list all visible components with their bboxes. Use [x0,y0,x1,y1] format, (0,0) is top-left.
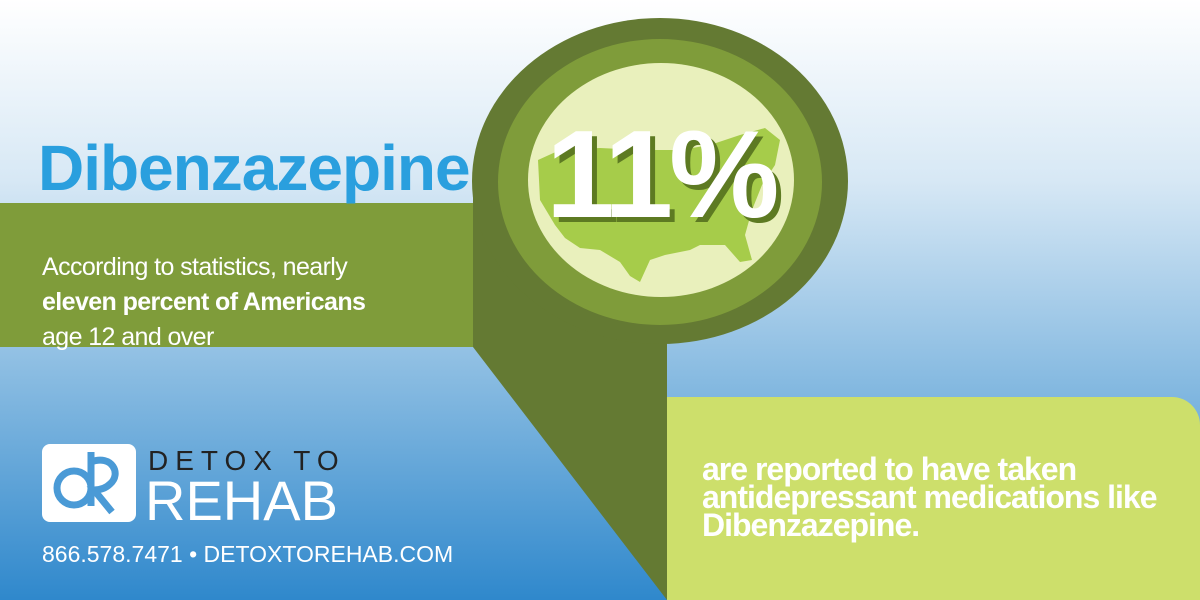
callout text: Dibenzazepine. [702,507,919,543]
text block: intro: age 12 and over [42,323,214,351]
11%: 11% [551,111,781,249]
callout box [667,397,1200,600]
logo [42,444,346,532]
icon: dR logo [42,444,136,522]
callout text: antidepressant medications like [702,479,1156,515]
callout text [702,451,1156,543]
icon: us map [538,128,780,282]
text block: intro: According to statistics, nearly [42,253,347,281]
text block: intro: eleven percent of Americans [42,288,365,316]
title: Dibenzazepine [38,132,470,204]
text block: intro [42,253,365,351]
contact line: 866.578.7471 • DETOXTOREHAB.COM [42,541,453,567]
graphic: circle pin: 11% [546,106,776,244]
green band [0,203,480,347]
callout text: are reported to have taken [702,451,1076,487]
logo text: DETOX TO [148,445,346,476]
logo: REHAB [145,469,338,532]
